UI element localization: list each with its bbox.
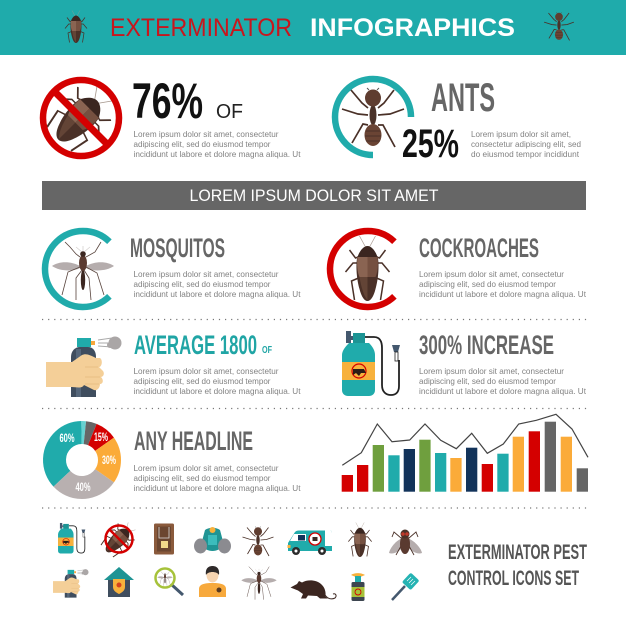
icon: hand with spray can — [53, 569, 89, 598]
donut chart: 40% — [76, 482, 90, 494]
body text — [134, 269, 301, 299]
icon: mouse trap — [154, 524, 174, 554]
body text: incididunt ut labore et dolore magna aliqua. Ut — [134, 289, 301, 299]
stat number: 25% — [402, 122, 459, 166]
icon: mosquito — [241, 567, 277, 600]
donut chart — [43, 421, 121, 499]
panel: cockroaches — [314, 215, 587, 323]
banner — [42, 181, 586, 210]
heading: AVERAGE 1800 — [134, 330, 257, 360]
donut chart: 60% — [60, 433, 74, 445]
body text: adipiscing elit, sed do eiusmod tempor — [419, 279, 556, 289]
icon: no cockroach — [96, 516, 142, 562]
body text: incididunt ut labore et dolore magna aliqua. Ut — [134, 483, 301, 493]
icon: fly swatter — [392, 573, 419, 600]
panel: mosquitos — [29, 215, 301, 323]
icon: pesticide sprayer — [342, 331, 400, 396]
icon: spray bottle — [351, 573, 365, 601]
body text: adipiscing elit, sed do eiusmod tempor — [134, 473, 271, 483]
body text: incididunt ut labore et dolore magna aliqua. Ut — [134, 149, 301, 159]
body text: adipiscing elit, sed do eiusmod tempor — [134, 279, 271, 289]
body text: adipiscing elit, sed do eiusmod tempor — [134, 376, 271, 386]
header title: infographics: INFOGRAPHICS — [310, 14, 515, 42]
icon: van — [288, 530, 332, 555]
body text: Lorem ipsum dolor sit amet, consectetur — [134, 129, 279, 139]
body text: Lorem ipsum dolor sit amet, — [471, 129, 571, 139]
icon: sprayer — [58, 523, 85, 554]
heading: ANY HEADLINE — [134, 426, 253, 456]
icon: header ant — [544, 12, 574, 40]
body text: Lorem ipsum dolor sit amet, consectetur — [134, 269, 279, 279]
body text: incididunt ut labore et dolore magna aliqua. Ut — [419, 289, 587, 299]
body text: Lorem ipsum dolor sit amet, consectetur — [134, 463, 279, 473]
stat suffix: OF — [216, 101, 243, 123]
icon: prohibited cockroach — [38, 73, 125, 160]
heading suffix: OF — [262, 345, 272, 356]
panel: average 1800 — [46, 330, 301, 397]
body text: do eiusmod tempor incididunt — [471, 149, 580, 159]
body text: incididunt ut labore et dolore magna aliqua. Ut — [419, 386, 587, 396]
body text: Lorem ipsum dolor sit amet, consectetur — [419, 269, 564, 279]
icon: cockroach with ring — [314, 215, 422, 323]
icon: header cockroach — [65, 10, 87, 43]
panel: any headline — [43, 421, 301, 499]
icon: rat — [290, 580, 336, 599]
icon: mosquito with ring — [29, 215, 137, 323]
panel: icon set — [53, 516, 587, 601]
body text — [134, 463, 301, 493]
icon: magnifier with mosquito — [156, 568, 183, 595]
icon: ant — [242, 526, 274, 556]
body text — [134, 129, 301, 159]
panel: 76 percent stat — [38, 73, 301, 160]
banner: LOREM IPSUM DOLOR SIT AMET — [190, 187, 438, 205]
stat number: 76% — [132, 73, 203, 129]
icon: hand with spray can — [46, 336, 122, 397]
header title: exterminator: EXTERMINATOR — [110, 14, 292, 42]
panel: ants stat — [335, 76, 581, 166]
header band — [0, 0, 626, 55]
icon: gas mask — [194, 527, 231, 554]
panel: 300 percent increase — [342, 330, 587, 396]
body text: consectetur adipiscing elit, sed — [471, 139, 581, 149]
body text: Lorem ipsum dolor sit amet, consectetur — [134, 366, 279, 376]
icon: cockroach — [348, 523, 372, 557]
bar and line chart — [342, 414, 588, 492]
icon: exterminator worker — [199, 566, 226, 597]
donut chart: 30% — [102, 455, 116, 467]
body text — [471, 129, 581, 159]
body text — [419, 366, 587, 396]
body text: adipiscing elit, sed do eiusmod tempor — [134, 139, 271, 149]
body text: Lorem ipsum dolor sit amet, consectetur — [419, 366, 564, 376]
heading: ants: ANTS — [431, 76, 495, 120]
icon: ant with ring — [335, 79, 411, 155]
icon set caption — [448, 541, 587, 590]
heading: MOSQUITOS — [130, 233, 225, 263]
body text — [134, 366, 301, 396]
body text: incididunt ut labore et dolore magna aliqua. Ut — [134, 386, 301, 396]
icon: fly — [389, 530, 422, 555]
donut chart: 15% — [94, 432, 108, 444]
body text — [419, 269, 587, 299]
body text: adipiscing elit, sed do eiusmod tempor — [419, 376, 556, 386]
icon: protected house — [104, 567, 134, 597]
